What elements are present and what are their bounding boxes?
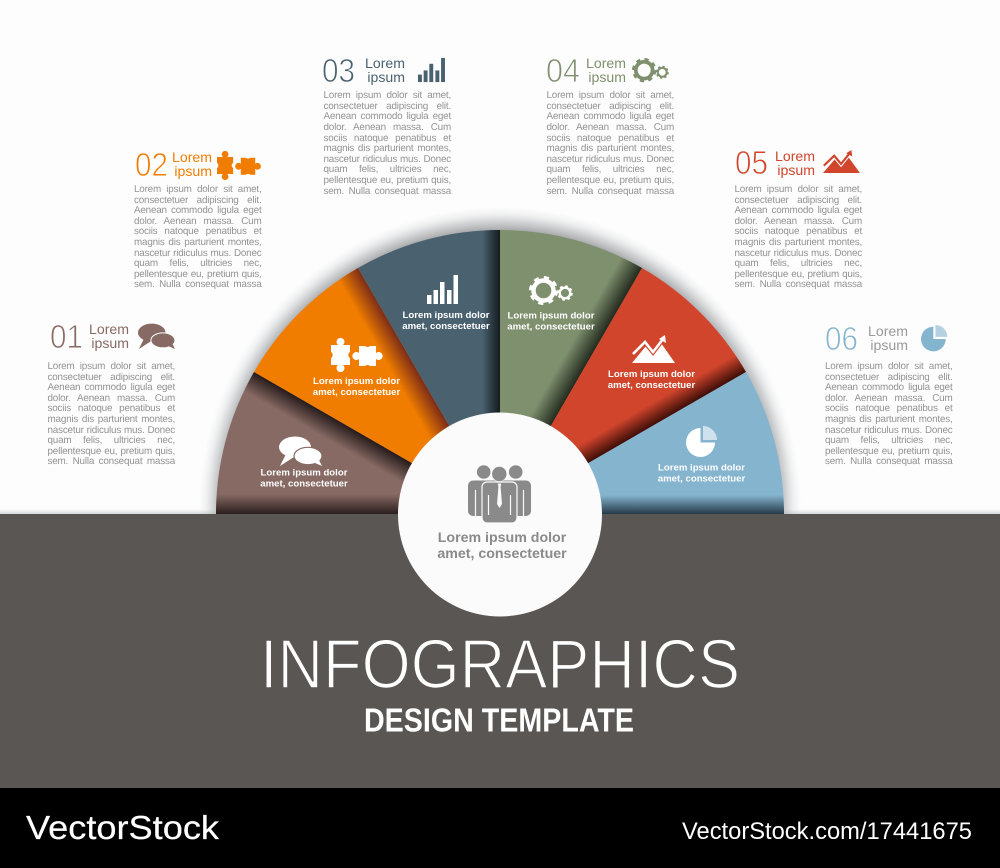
item 05 header: Lorem xyxy=(775,148,815,164)
slice 05 xyxy=(500,268,746,514)
item 03 body text: Aenean commodo ligula eget xyxy=(324,111,451,122)
watermark footer bar xyxy=(0,788,1000,868)
semicircle chart xyxy=(216,230,784,514)
slice 03 label xyxy=(402,310,490,332)
dark bottom panel xyxy=(0,514,1000,788)
item 04 body text: magnis dis parturient montes, xyxy=(546,143,674,154)
item 06 body text: sem. Nulla consequat massa xyxy=(825,456,952,467)
item 01 body text: magnis dis parturient montes, xyxy=(48,414,175,425)
item 04 body text: quam felis, ultricies nec, xyxy=(546,164,674,175)
item 06 body text: quam felis, ultricies nec, xyxy=(825,435,952,446)
item 04 body text: dolor. Aenean massa. Cum xyxy=(546,122,674,133)
item 04 body text xyxy=(546,90,674,197)
item 05 body text: sociis natoque penatibus et xyxy=(734,226,862,237)
center circle xyxy=(398,412,602,616)
item 02 body text: consectetuer adipiscing elit. xyxy=(134,195,262,206)
item 06 body text: Lorem ipsum dolor sit amet, xyxy=(825,361,952,372)
slice 02 xyxy=(254,268,500,514)
item 03 body text: Lorem ipsum dolor sit amet, xyxy=(324,90,451,101)
item 04 body text: nascetur ridiculus mus. Donec xyxy=(546,154,674,165)
item 03 body text: sociis natoque penatibus et xyxy=(324,133,451,144)
item 06 body text: dolor. Aenean massa. Cum xyxy=(825,393,952,404)
slice 04 label: amet, consectetuer xyxy=(507,322,595,332)
center label: amet, consectetuer xyxy=(437,546,567,562)
slice 06 label: Lorem ipsum dolor xyxy=(658,462,745,474)
item 02 body text: pellentesque eu, pretium quis, xyxy=(134,269,262,280)
item 01 body text: sociis natoque penatibus et xyxy=(48,403,175,414)
slice 05 label: Lorem ipsum dolor xyxy=(608,369,695,380)
item 03 header: Lorem xyxy=(365,55,405,71)
item 05 body text: magnis dis parturient montes, xyxy=(734,237,862,248)
item 02 body text: nascetur ridiculus mus. Donec xyxy=(134,248,262,259)
item 01 body text: Aenean commodo ligula eget xyxy=(48,382,175,393)
item 04 body text: Aenean commodo ligula eget xyxy=(546,111,674,122)
footer brand: VectorStock xyxy=(26,809,220,846)
item 04 header: 04 xyxy=(546,52,580,89)
item 01 header: Lorem xyxy=(89,321,129,337)
arch drop shadow xyxy=(0,212,1000,514)
item 05 body text: Aenean commodo ligula eget xyxy=(734,205,862,216)
subtitle: DESIGN TEMPLATE xyxy=(364,702,634,738)
slice 01 label xyxy=(260,468,348,490)
item 02 header: 02 xyxy=(135,146,168,183)
item 05 body text xyxy=(734,184,862,290)
item 06 body text: consectetuer adipiscing elit. xyxy=(825,372,952,383)
item 06 body text: magnis dis parturient montes, xyxy=(825,414,952,425)
item 02 body text: magnis dis parturient montes, xyxy=(134,237,262,248)
item 04 body text: Lorem ipsum dolor sit amet, xyxy=(546,90,674,101)
item 06 header: Lorem xyxy=(868,323,908,339)
slice 01 label: Lorem ipsum dolor xyxy=(261,468,348,478)
slice 05 label xyxy=(608,369,695,391)
item 05 body text: Lorem ipsum dolor sit amet, xyxy=(734,184,862,195)
item 03 body text: pellentesque eu, pretium quis, xyxy=(324,175,451,186)
page background xyxy=(0,0,1000,514)
slice 01 xyxy=(216,372,500,514)
item 01 body text: sem. Nulla consequat massa xyxy=(48,456,175,467)
item 01 body text: nascetur ridiculus mus. Donec xyxy=(48,425,175,436)
item 02 body text: Aenean commodo ligula eget xyxy=(134,205,262,216)
footer image id: VectorStock.com/17441675 xyxy=(682,818,972,845)
center label: Lorem ipsum dolor xyxy=(438,530,567,546)
center label xyxy=(437,530,567,562)
item 05 body text: consectetuer adipiscing elit. xyxy=(734,195,862,206)
slice 01 label: amet, consectetuer xyxy=(260,478,348,490)
item 06 body text: nascetur ridiculus mus. Donec xyxy=(825,425,952,436)
item 02 body text: quam felis, ultricies nec, xyxy=(134,258,262,269)
item 06 header: ipsum xyxy=(870,337,908,353)
icon: slice 04 gears xyxy=(531,278,572,303)
item 01 body text: pellentesque eu, pretium quis, xyxy=(48,446,175,457)
slice 02 label xyxy=(313,376,400,398)
item 02 body text xyxy=(134,184,262,290)
icon: team of people xyxy=(468,465,531,523)
item 06 header xyxy=(825,320,947,357)
item 01 header: 01 xyxy=(50,318,83,355)
slice 06 label: amet, consectetuer xyxy=(658,474,745,484)
icon: slice 01 speech bubbles xyxy=(279,436,322,466)
item 06 body text: sociis natoque penatibus et xyxy=(825,403,952,414)
item 05 body text: nascetur ridiculus mus. Donec xyxy=(734,248,862,259)
item 02 body text: Lorem ipsum dolor sit amet, xyxy=(134,184,262,195)
item 01 header: ipsum xyxy=(91,335,129,351)
item 04 header: Lorem xyxy=(586,55,626,71)
item 01 body text: dolor. Aenean massa. Cum xyxy=(48,393,175,404)
slice 05 label: amet, consectetuer xyxy=(608,380,695,391)
slice 03 label: Lorem ipsum dolor xyxy=(403,310,490,321)
item 03 body text: nascetur ridiculus mus. Donec xyxy=(324,154,451,165)
item 06 body text xyxy=(825,361,953,467)
item 03 body text: quam felis, ultricies nec, xyxy=(324,164,451,175)
item 01 header xyxy=(50,318,175,355)
item 02 header: ipsum xyxy=(174,163,212,179)
slice 04 label xyxy=(507,310,595,332)
slice 02 label: amet, consectetuer xyxy=(313,387,400,398)
item 05 body text: pellentesque eu, pretium quis, xyxy=(734,269,862,280)
slice 03 xyxy=(358,230,500,514)
item 03 header: 03 xyxy=(322,52,355,89)
item 01 body text: Lorem ipsum dolor sit amet, xyxy=(48,361,175,372)
item 05 body text: quam felis, ultricies nec, xyxy=(734,258,862,269)
slice 02 label: Lorem ipsum dolor xyxy=(313,376,400,387)
item 04 header: ipsum xyxy=(588,69,626,85)
item 04 header xyxy=(546,52,668,89)
item 03 body text: magnis dis parturient montes, xyxy=(324,143,451,154)
item 04 body text: sociis natoque penatibus et xyxy=(546,133,674,144)
slice 03 label: amet, consectetuer xyxy=(402,321,490,332)
item 02 body text: sociis natoque penatibus et xyxy=(134,226,262,237)
item 05 header xyxy=(735,144,860,181)
slice 06 label xyxy=(658,462,745,484)
item 03 body text: consectetuer adipiscing elit. xyxy=(324,101,451,112)
item 03 body text: sem. Nulla consequat massa xyxy=(324,186,451,197)
item 01 body text xyxy=(48,361,176,467)
item 02 body text: sem. Nulla consequat massa xyxy=(134,279,262,290)
item 03 header xyxy=(322,52,445,89)
item 02 header: Lorem xyxy=(172,149,212,165)
icon: slice 06 pie xyxy=(686,426,717,457)
slice 06 xyxy=(500,372,784,514)
item 06 header: 06 xyxy=(825,320,858,357)
item 02 header xyxy=(135,146,261,183)
item 04 body text: sem. Nulla consequat massa xyxy=(546,186,674,197)
item 05 header: 05 xyxy=(735,144,768,181)
slice 04 label: Lorem ipsum dolor xyxy=(508,310,595,322)
item 02 body text: dolor. Aenean massa. Cum xyxy=(134,216,262,227)
slice 04 xyxy=(500,230,642,514)
item 01 body text: quam felis, ultricies nec, xyxy=(48,435,175,446)
item 03 body text: dolor. Aenean massa. Cum xyxy=(324,122,451,133)
item 04 body text: consectetuer adipiscing elit. xyxy=(546,101,674,112)
item 05 header: ipsum xyxy=(777,162,815,178)
item 03 body text xyxy=(324,90,452,197)
item 01 body text: consectetuer adipiscing elit. xyxy=(48,372,175,383)
icon: slice 05 chart xyxy=(632,335,675,363)
item 06 body text: Aenean commodo ligula eget xyxy=(825,382,952,393)
icon: slice 02 puzzle xyxy=(331,338,383,372)
item 05 body text: sem. Nulla consequat massa xyxy=(734,279,862,290)
item 05 body text: dolor. Aenean massa. Cum xyxy=(734,216,862,227)
item 03 header: ipsum xyxy=(367,69,405,85)
item 04 body text: pellentesque eu, pretium quis, xyxy=(546,175,674,186)
item 06 body text: pellentesque eu, pretium quis, xyxy=(825,446,952,457)
icon: slice 03 bars xyxy=(427,275,458,304)
title: INFOGRAPHICS xyxy=(260,625,740,703)
